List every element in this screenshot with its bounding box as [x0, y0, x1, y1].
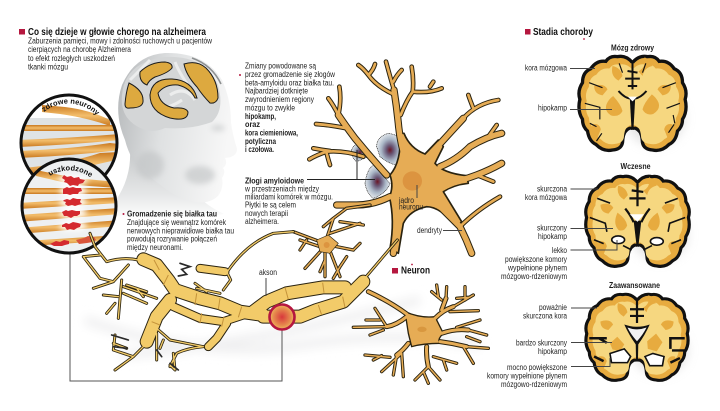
axon segment dividers: [152, 260, 345, 327]
red tau tangles: [58, 175, 88, 231]
text: changes: [239, 62, 335, 154]
brain: advanced: hipokamp: [538, 347, 567, 356]
text: changes: Najbardziej dotknięte: [245, 86, 308, 96]
text: amyloid plaques: Płytki te są celem: [245, 200, 296, 210]
text: tau: Gromadzenie się białka tau: [127, 210, 217, 218]
text: amyloid plaques: alzheimera.: [245, 217, 279, 226]
amyloid plaques: [352, 133, 403, 198]
heading: stages: [525, 27, 593, 40]
sulci: [585, 63, 680, 141]
region: frontal: [184, 63, 218, 103]
text: changes: potyliczna: [245, 137, 276, 146]
skull rim: [192, 58, 221, 84]
region: occipital: [125, 83, 143, 108]
nucleus: [417, 327, 427, 332]
label: akson: akson: [259, 268, 277, 277]
head: [118, 53, 237, 203]
labels: poważnie: [539, 303, 567, 312]
lower neuron: [353, 285, 488, 383]
text: amyloid plaques: w przestrzeniach między: [244, 184, 319, 194]
label: dendrites: dendryty: [417, 226, 442, 235]
text: amyloid plaques: nowych terapii: [245, 209, 288, 218]
label: nucleus: jądro: [398, 196, 414, 205]
text: changes: kora ciemieniowa,: [245, 128, 298, 138]
text: tau: [122, 210, 234, 252]
text: tau: między neuronami.: [127, 243, 183, 252]
label: nucleus: [398, 185, 423, 212]
sulci: [590, 198, 685, 250]
label: zdrowe neurony: zdrowe neurony: [42, 100, 100, 115]
hippocampus: [615, 213, 660, 231]
text: changes: hipokamp,: [245, 112, 276, 121]
text: changes: i czołowa.: [245, 145, 274, 154]
main neuron: [309, 62, 502, 253]
intro text: cierpiących na chorobę Alzheimera: [28, 45, 131, 54]
leader line from nerve circle to axon: [70, 250, 282, 381]
brain: early: kora mózgowa: [525, 193, 567, 202]
head with brain regions: [105, 53, 237, 219]
region: parietal: [140, 62, 172, 85]
red marker on axon: [270, 304, 294, 330]
intro text: Zaburzenia pamięci, mowy i zdolności ruchowych u pacjentów: [28, 36, 212, 46]
brain: advanced: mózgowo-rdzeniowym: [501, 380, 567, 389]
text: amyloid plaques: Złogi amyloidowe: [245, 176, 304, 186]
label: nucleus: neuronu: [399, 202, 423, 212]
region: hippocampus: [150, 79, 197, 119]
labels: skurczona: [537, 184, 567, 194]
fissure and ventricle: [619, 61, 646, 99]
brain: advanced: komory wypełnione płynem: [487, 372, 567, 380]
fissure and ventricle: [630, 299, 644, 323]
brain: healthy: Mózg zdrowy: [611, 44, 654, 52]
brain: early: [501, 162, 689, 281]
plaque leader lines: [307, 150, 375, 180]
folds: [130, 60, 195, 110]
fissure and ventricle: [625, 181, 650, 222]
label: uszkodzone: uszkodzone: [48, 165, 92, 177]
hippocampus: [610, 334, 662, 351]
heading: neuron: [392, 264, 430, 276]
text: changes: Zmiany powodowane są: [245, 62, 316, 70]
face shading: [136, 125, 225, 184]
neck and shoulders: [105, 150, 224, 219]
brain: healthy: hipokamp: [538, 104, 567, 112]
text: changes: zwyrodnieniem regiony: [245, 95, 314, 104]
text: tau: Znajdujące się wewnątrz komórek: [127, 218, 227, 227]
text: changes: mózgu to zwykle: [245, 104, 295, 112]
circle: healthy neurons: [20, 94, 118, 176]
text: changes: beta-amyloidu oraz białka tau.: [245, 78, 334, 88]
brain: early: hipokamp: [538, 232, 567, 241]
brain: early: powiększone komory: [505, 255, 567, 264]
labels: kora mózgowa: [525, 64, 567, 72]
brain: early: wypełnione płynem: [507, 264, 567, 272]
circle: damaged neurons: [20, 158, 118, 254]
text: tau: nerwowych nieprawidłowe białka tau: [127, 226, 234, 236]
brain: early: mózgowo-rdzeniowym: [501, 272, 567, 281]
text: changes: przez gromadzenie się złogów: [245, 70, 335, 79]
sulci: [589, 338, 685, 363]
text: amyloid plaques: miliardami komórek w mózgu.: [245, 192, 333, 202]
heading: neuron: Neuron: [401, 266, 430, 276]
brain: healthy: [525, 44, 686, 150]
label: dendrites: [417, 226, 462, 235]
brain: advanced: bardzo skurczony: [516, 338, 567, 348]
brain mass in the skull: [122, 57, 220, 131]
neuron drop shadow: [85, 300, 480, 355]
small neuron: [293, 205, 370, 278]
text: tau: powodują rozrywanie połączeń: [127, 234, 217, 244]
brain: advanced: mocno powiększone: [507, 363, 567, 372]
cell body: [389, 133, 468, 253]
heading: stages: Stadia choroby: [533, 27, 593, 38]
brain: advanced: [487, 281, 688, 389]
dark dendrite tips: [112, 263, 190, 370]
brain: early: Wczesne: [620, 162, 651, 171]
axon: [83, 232, 397, 370]
text: amyloid plaques: [244, 176, 333, 226]
brain: early: skurczony: [537, 224, 567, 232]
brain: early: lekko: [552, 246, 567, 255]
enlarged ventricles: [612, 236, 625, 244]
label: akson: [259, 268, 277, 296]
intro text: to efekt rozległych uszkodzeń: [28, 54, 115, 63]
brain: advanced: Zaawansowane: [609, 281, 660, 290]
enlarged ventricles: [610, 349, 631, 363]
nucleus: [403, 171, 422, 191]
hippocampus: [606, 94, 659, 116]
brain: advanced: skurczona kora: [523, 312, 567, 320]
intro text: tkanki mózgu: [28, 62, 68, 72]
text: changes: oraz: [245, 120, 260, 129]
title: Co się dzieje w głowie chorego na alzheimera: [28, 27, 206, 38]
intro text: [28, 36, 212, 72]
